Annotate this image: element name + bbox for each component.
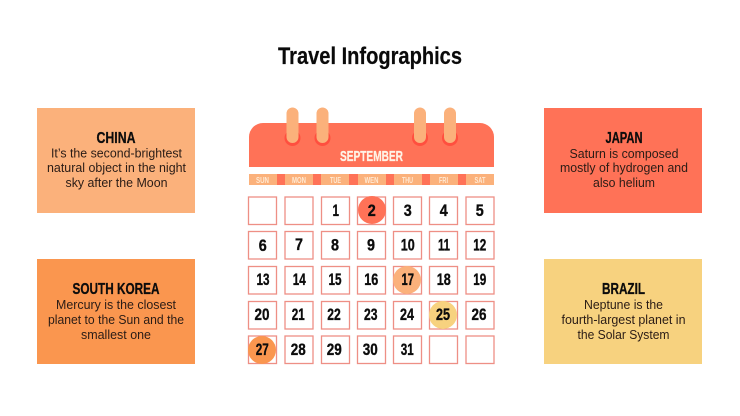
text block: Japan description: also helium <box>593 175 655 190</box>
date numbers: 25 <box>436 306 450 324</box>
weekday bar <box>249 174 494 185</box>
weekday bar: SAT <box>474 176 486 185</box>
date numbers: 29 <box>327 341 342 359</box>
weekday bar: FRI <box>439 176 448 185</box>
panel: China <box>37 108 195 213</box>
date numbers: 24 <box>400 306 415 324</box>
text block: China description: natural object in the night <box>47 160 186 175</box>
date numbers: 5 <box>476 202 484 220</box>
panel: Japan <box>544 108 702 213</box>
date numbers: 12 <box>473 236 486 254</box>
weekday bar: MON <box>292 176 306 185</box>
date numbers: 21 <box>292 306 305 324</box>
weekday bar: TUE <box>330 176 341 185</box>
date numbers: 31 <box>401 341 414 359</box>
text block: Japan description <box>560 146 688 190</box>
text block: South Korea description <box>48 297 184 342</box>
date numbers: 16 <box>364 271 378 289</box>
heading: South Korea: SOUTH KOREA <box>72 281 160 298</box>
date numbers: 9 <box>367 236 375 254</box>
date numbers: 17 <box>401 271 414 289</box>
date numbers: 6 <box>259 237 267 255</box>
date grid <box>248 197 494 364</box>
text block: Brazil description: the Solar System <box>578 327 670 342</box>
date numbers: 11 <box>438 236 450 254</box>
date numbers: 1 <box>332 202 339 220</box>
date numbers: 4 <box>440 202 448 220</box>
text block: Japan description: Saturn is composed <box>570 146 678 161</box>
text block: South Korea description: planet to the Sun and the <box>48 312 184 327</box>
text block: China description: It’s the second-brightest <box>51 146 182 160</box>
weekday bar: THU <box>402 176 413 185</box>
text block: Brazil description: Neptune is the <box>584 297 663 312</box>
text block: Brazil description <box>562 297 686 342</box>
panel: Brazil <box>544 259 702 364</box>
text block: China description: sky after the Moon <box>66 175 168 190</box>
heading: Brazil: BRAZIL <box>602 281 645 298</box>
month label: SEPTEMBER <box>340 148 403 165</box>
date numbers: 15 <box>328 271 342 289</box>
date numbers: 20 <box>254 306 270 324</box>
panel: South Korea <box>37 259 195 364</box>
date numbers: 14 <box>293 271 306 289</box>
text block: South Korea description: smallest one <box>81 327 151 342</box>
date numbers: 19 <box>473 271 486 289</box>
date numbers: 22 <box>327 306 341 324</box>
calendar header <box>249 108 494 167</box>
icon: binding rings <box>284 108 458 146</box>
date numbers: 3 <box>404 202 412 220</box>
date numbers <box>254 202 486 359</box>
weekday bar: WEN <box>364 176 379 185</box>
date numbers: 18 <box>437 271 451 289</box>
heading: Japan: JAPAN <box>606 130 642 147</box>
heading: China: CHINA <box>96 130 136 147</box>
date highlights <box>248 196 457 364</box>
title: Travel Infographics <box>278 43 462 70</box>
weekday bar: SUN <box>256 176 269 185</box>
text block: Japan description: mostly of hydrogen and <box>560 160 688 175</box>
calendar <box>248 108 494 364</box>
date numbers: 27 <box>256 341 269 359</box>
date numbers: 30 <box>363 341 378 359</box>
date numbers: 2 <box>368 202 376 220</box>
date numbers: 28 <box>291 341 306 359</box>
date numbers: 13 <box>256 271 270 289</box>
date numbers: 10 <box>401 236 415 254</box>
text block: South Korea description: Mercury is the closest <box>56 297 176 312</box>
date numbers: 23 <box>364 306 377 324</box>
date numbers: 26 <box>472 306 486 324</box>
date numbers: 7 <box>295 236 303 254</box>
text block: China description <box>47 146 186 190</box>
text block: Brazil description: fourth-largest planet in <box>562 312 686 327</box>
date numbers: 8 <box>331 236 339 254</box>
